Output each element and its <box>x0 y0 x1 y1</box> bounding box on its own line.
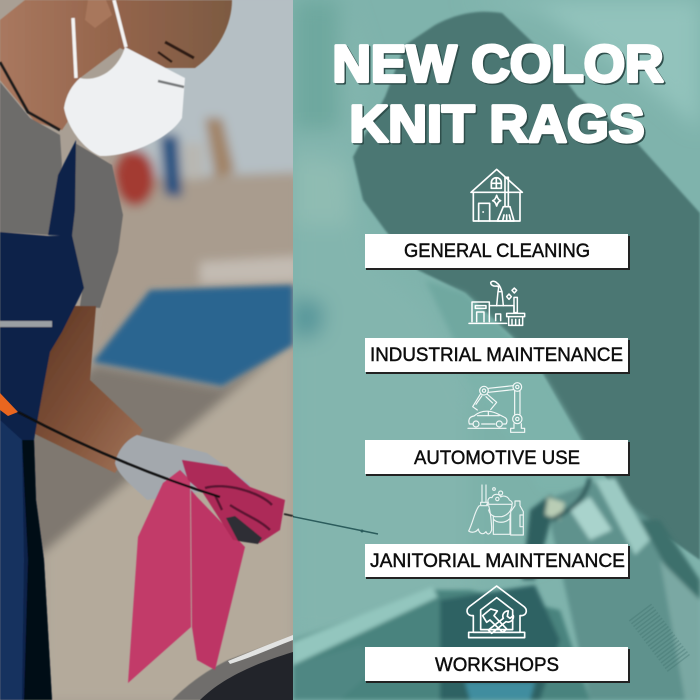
apron strap and bib <box>48 140 76 236</box>
shirt <box>0 82 62 235</box>
face mask <box>64 47 185 156</box>
label: janitorial maintenance <box>365 544 630 579</box>
rag <box>128 470 191 683</box>
dark windshield shape <box>353 12 700 560</box>
title line 1 shadow and text: NEW COLOR <box>332 36 664 94</box>
body <box>0 0 250 700</box>
engine hood <box>172 636 293 700</box>
label: workshops <box>365 647 630 683</box>
photo: mechanic checking oil <box>0 0 310 700</box>
arm <box>33 306 143 473</box>
label: automotive use: AUTOMOTIVE USE <box>414 448 580 469</box>
glove <box>115 435 250 500</box>
photo: dipstick and pink rag <box>18 412 293 683</box>
icon: robot arm and car <box>468 383 525 432</box>
neck and face <box>0 0 232 130</box>
icon: house with broom <box>471 169 522 221</box>
label: industrial maintenance: INDUSTRIAL MAINTENANCE <box>370 345 623 366</box>
icon: factory with broom <box>469 281 525 325</box>
label: industrial maintenance <box>365 338 630 374</box>
title line 2 shadow and text: KNIT RAGS <box>350 96 644 154</box>
label: general cleaning <box>365 234 630 270</box>
blue mat <box>93 285 293 386</box>
label: general cleaning: GENERAL CLEANING <box>404 241 590 262</box>
title line 2 shadow and text: KNIT RAGS <box>351 97 646 155</box>
engine bay details <box>293 478 700 700</box>
icon: house with tools <box>467 586 526 638</box>
title <box>332 36 665 155</box>
panel: teal photo overlay <box>285 0 700 700</box>
label: automotive use <box>365 440 630 476</box>
title line 1 shadow and text: NEW COLOR <box>334 37 665 95</box>
dipstick end <box>285 515 378 534</box>
label: janitorial maintenance: JANITORIAL MAINTENANCE <box>370 551 625 572</box>
icon: mop, bucket and bottle <box>469 485 523 535</box>
label: workshops: WORKSHOPS <box>435 655 559 676</box>
